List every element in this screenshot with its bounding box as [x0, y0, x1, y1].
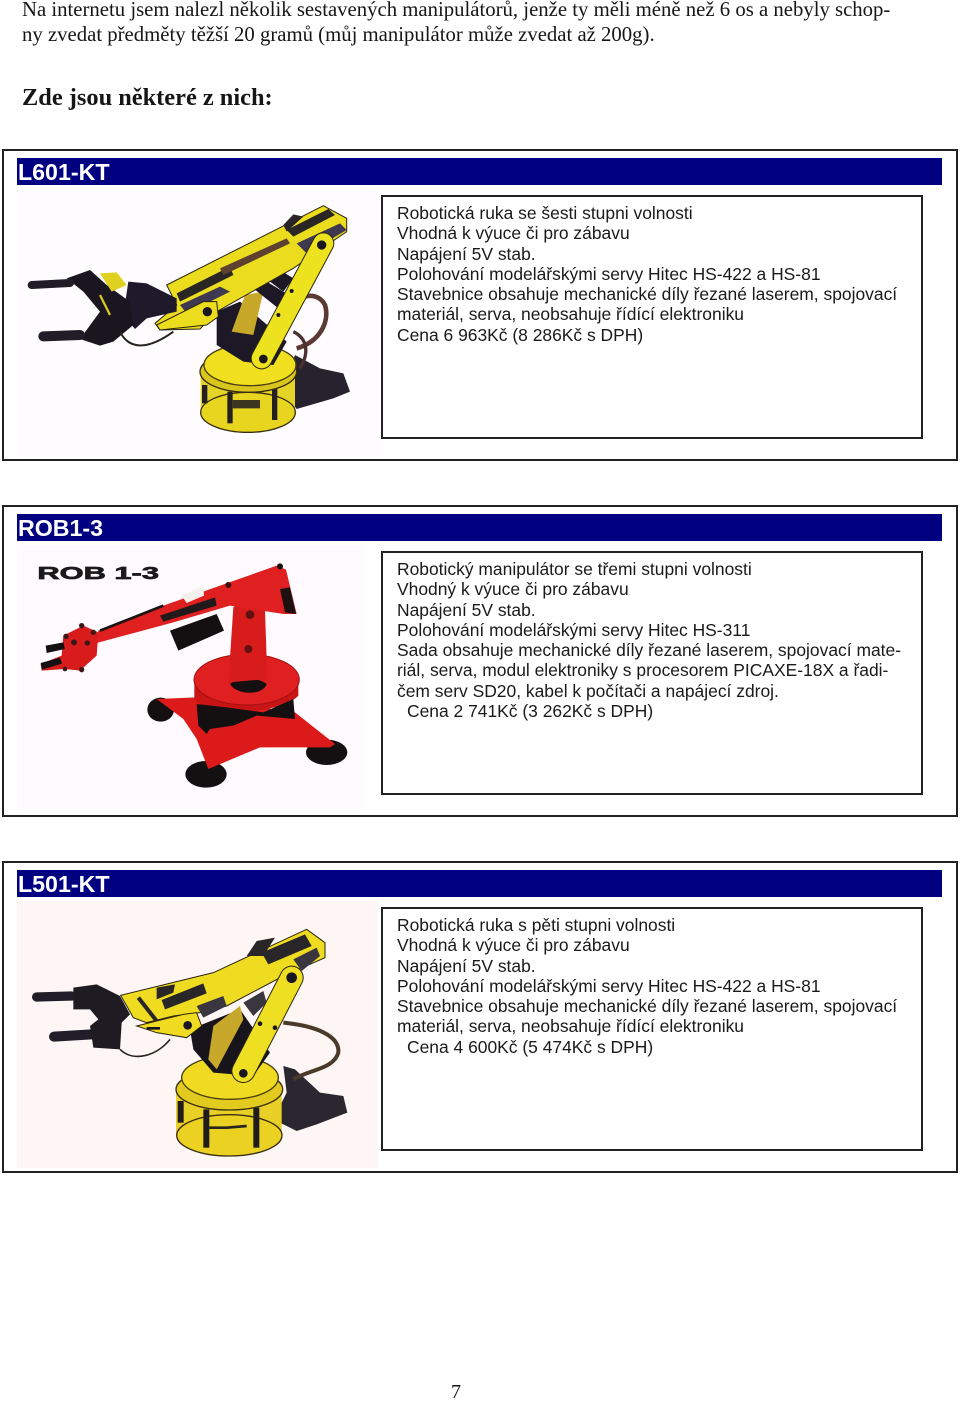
header bar: L501-KT [17, 870, 942, 897]
photo: yellow robotic arm L501-KT [17, 901, 378, 1168]
header bar: ROB1-3: ROB1-3 [18, 515, 103, 541]
text box: L601-KT: Robotická ruka se šesti stupni volnosti [397, 203, 693, 223]
text box: ROB1-3: Sada obsahuje mechanické díly řezané laserem, spojovací mate- [397, 640, 901, 660]
text box: ROB1-3: riál, serva, modul elektroniky s procesorem PICAXE-18X a řadi- [397, 660, 888, 680]
photo: red robotic arm ROB1-3 [37, 563, 348, 788]
intro paragraph: ny zvedat předměty těžší 20 gramů (můj manipulátor může zvedat až 200g). [22, 24, 655, 46]
text box: L601-KT [381, 195, 923, 439]
header bar: ROB1-3 [17, 514, 942, 541]
text box: L501-KT: Robotická ruka s pěti stupni volnosti [397, 915, 675, 935]
photo: red robotic arm ROB1-3: ROB 1-3 [37, 563, 160, 583]
text box: ROB1-3: Cena 2 741Kč (3 262Kč s DPH) [407, 701, 653, 721]
text box: L501-KT [381, 907, 923, 1151]
text box: L601-KT: Vhodná k výuce či pro zábavu [397, 223, 630, 243]
page number: 7 [451, 1381, 461, 1403]
panel: ROB1-3 [2, 505, 958, 817]
intro paragraph [22, 0, 890, 46]
text box: L501-KT: materiál, serva, neobsahuje řídící elektroniku [397, 1016, 744, 1036]
header bar: L601-KT [17, 158, 942, 185]
panel: L601-KT [2, 149, 958, 461]
text box: L501-KT: Stavebnice obsahuje mechanické díly řezané laserem, spojovací [397, 996, 897, 1016]
text box: ROB1-3: Vhodný k výuce či pro zábavu [397, 579, 629, 599]
heading: Zde jsou některé z nich: [22, 84, 273, 111]
header bar: L601-KT: L601-KT [18, 159, 109, 185]
photo: yellow robotic arm L601-KT [28, 205, 350, 433]
text box: ROB1-3: Napájení 5V stab. [397, 600, 536, 620]
text box: L601-KT: Napájení 5V stab. [397, 244, 536, 264]
text box: L601-KT: Polohování modelářskými servy Hitec HS-422 a HS-81 [397, 264, 821, 284]
text box: ROB1-3 [381, 551, 923, 795]
text box: ROB1-3: čem serv SD20, kabel k počítači a napájecí zdroj. [397, 681, 779, 701]
text box: ROB1-3: Robotický manipulátor se třemi stupni volnosti [397, 559, 752, 579]
text box: L501-KT: Cena 4 600Kč (5 474Kč s DPH) [407, 1037, 653, 1057]
text box: L601-KT: materiál, serva, neobsahuje řídící elektroniku [397, 304, 744, 324]
text box: L601-KT: Cena 6 963Kč (8 286Kč s DPH) [397, 325, 643, 345]
text box: L501-KT: Napájení 5V stab. [397, 956, 536, 976]
text box: L501-KT: Polohování modelářskými servy Hitec HS-422 a HS-81 [397, 976, 821, 996]
text box: ROB1-3: Polohování modelářskými servy Hitec HS-311 [397, 620, 750, 640]
text box: L501-KT: Vhodná k výuce či pro zábavu [397, 935, 630, 955]
header bar: L501-KT: L501-KT [18, 871, 109, 897]
panel: L501-KT [2, 861, 958, 1173]
text box: L601-KT: Stavebnice obsahuje mechanické díly řezané laserem, spojovací [397, 284, 897, 304]
